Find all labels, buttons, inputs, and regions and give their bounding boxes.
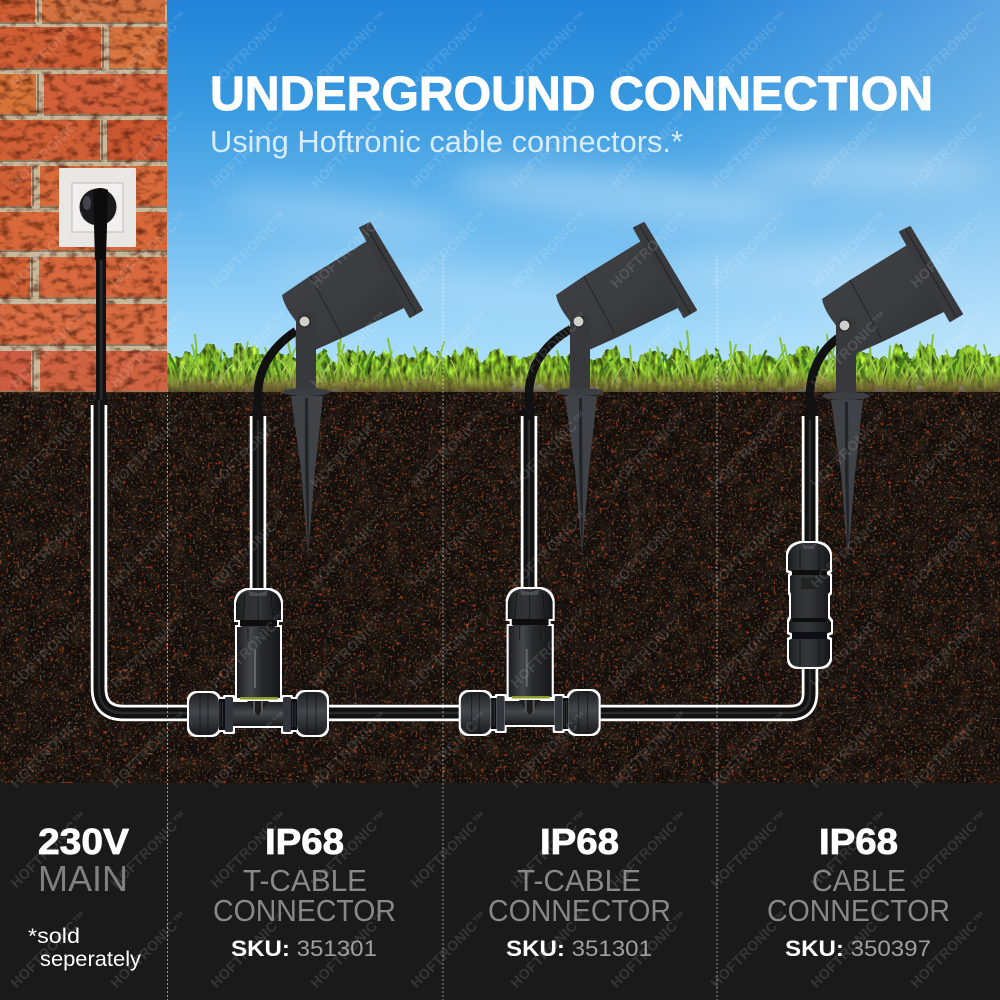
column: 230V main: 230V	[38, 821, 129, 862]
title: UNDERGROUND CONNECTION	[210, 68, 933, 121]
column divider lines	[168, 255, 717, 1000]
subtitle: Using Hoftronic cable connectors.*	[210, 124, 683, 159]
straight cable connector	[788, 543, 831, 667]
column: cable connector: IP68	[819, 821, 898, 862]
lamp cables above ground	[258, 329, 838, 420]
clouds	[219, 150, 990, 320]
column: 230V main: seperately	[40, 948, 142, 971]
grass strip	[160, 331, 1000, 394]
main power cable and plug	[80, 188, 116, 408]
column: T-cable connector 1: SKU: 351301	[231, 936, 377, 961]
column: T-cable connector 2: SKU: 351301	[506, 936, 652, 961]
column: T-cable connector 2: T-CABLE	[517, 863, 641, 898]
column: cable connector: SKU: 350397	[785, 936, 931, 961]
soil	[0, 392, 1000, 784]
column: cable connector: CABLE	[812, 863, 906, 898]
spike lamp 1	[282, 223, 422, 556]
T-cable connector 1	[189, 590, 327, 735]
column: T-cable connector 2: IP68	[540, 821, 619, 862]
spike lamp 3	[822, 227, 962, 560]
sky background	[167, 0, 1000, 395]
wall socket plate	[59, 168, 136, 247]
underground cable with white outline	[99, 400, 810, 713]
column: T-cable connector 1: T-CABLE	[243, 863, 367, 898]
column: cable connector: CONNECTOR	[767, 893, 950, 928]
column: T-cable connector 1: CONNECTOR	[213, 893, 396, 928]
column: cable connector	[767, 821, 950, 961]
T-cable connector 2	[461, 589, 599, 734]
column: 230V main: *sold	[28, 925, 80, 948]
column: 230V main	[28, 821, 142, 971]
spike lamp 2	[556, 223, 696, 556]
column: 230V main: MAIN	[38, 858, 128, 899]
bottom dark panel	[0, 783, 1000, 1000]
column: T-cable connector 1	[213, 821, 396, 961]
column: T-cable connector 2: CONNECTOR	[488, 893, 671, 928]
column: T-cable connector 1: IP68	[265, 821, 344, 862]
brick wall	[0, 0, 167, 392]
column: T-cable connector 2	[488, 821, 671, 961]
